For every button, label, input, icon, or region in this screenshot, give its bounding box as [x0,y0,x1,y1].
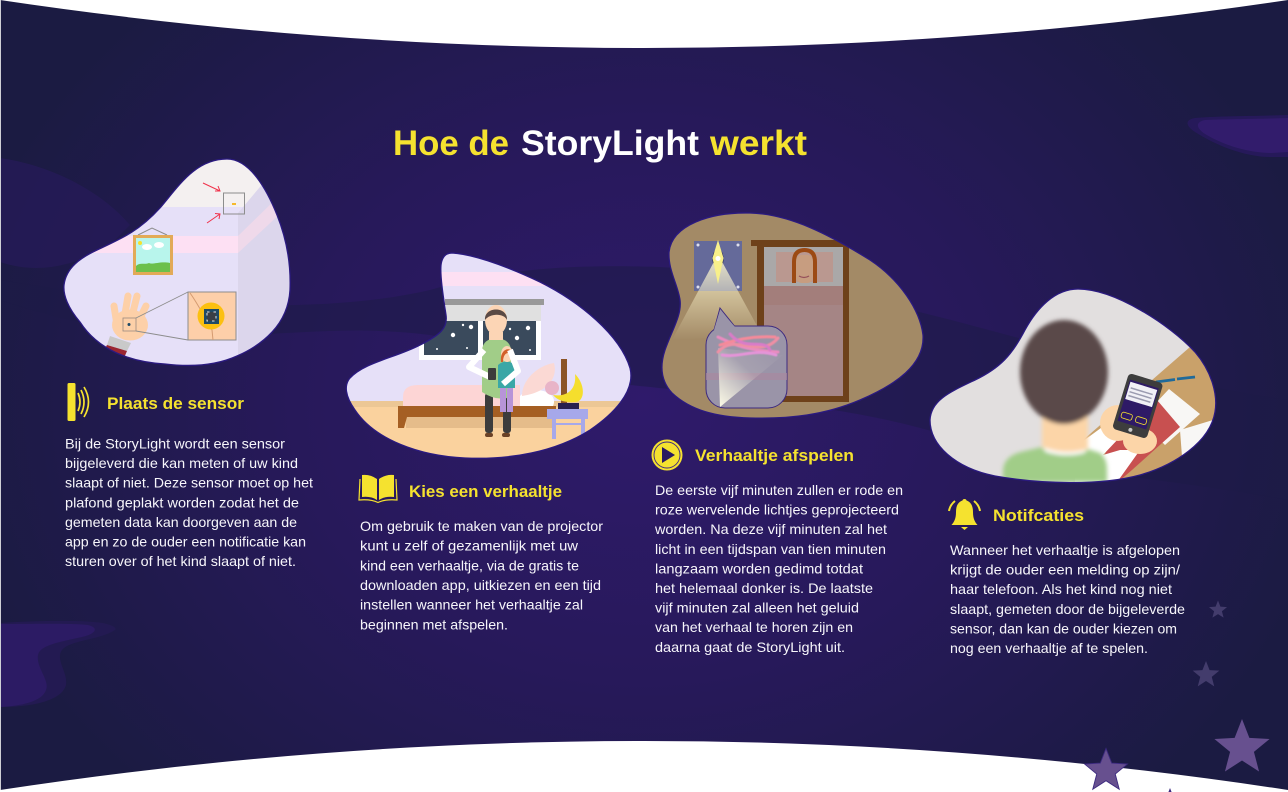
text block: kunt u zelf of gezamenlijk met uw [360,538,579,554]
illustration: parent viewing phone notification [929,288,1216,484]
title [393,124,807,163]
icon: play button [652,440,682,470]
text block [950,542,1185,656]
decorative stars [1085,600,1270,792]
panel: verhaaltje afspelen [652,208,930,655]
heading: Notifcaties [993,506,1084,525]
text block: Om gebruik te maken van de projector [360,518,603,534]
title: Hoe de [393,124,509,163]
text block: Bij de StoryLight wordt een sensor [65,436,285,452]
heading: Verhaaltje afspelen [695,446,854,465]
text block: bijgeleverd die kan meten of uw kind [65,455,298,471]
text block: vijf minuten zal alleen het geluid [655,600,859,616]
text block: Wanneer het verhaaltje is afgelopen [950,542,1180,558]
text block: daarna gaat de StoryLight uit. [655,639,845,655]
text block: De eerste vijf minuten zullen er rode en [655,482,903,498]
text block [65,436,313,569]
text block: worden. Na deze vijf minuten zal het [654,521,887,537]
text block: instellen wanneer het verhaaltje zal [360,597,583,613]
text block: plafond geplakt worden zodat het de [65,494,299,510]
heading: Plaats de sensor [107,394,244,413]
panel: notificaties [925,285,1230,656]
text block: app en zo de ouder een notificatie kan [65,534,306,550]
text block: downloaden app, uitkiezen en een tijd [360,577,601,593]
text block: krijgt de ouder een melding op zijn/ [950,562,1180,578]
text block: sturen over of het kind slaapt of niet. [65,553,296,569]
text block: sensor, dan kan de ouder kiezen om [950,621,1177,637]
title: StoryLight [521,124,699,163]
text block: beginnen met afspelen. [360,616,508,632]
icon: bell [949,499,980,530]
text block: langzaam worden gedimd totdat [655,560,863,576]
text block [654,482,903,655]
illustration: projector lights over sleeping child [655,208,930,423]
text block: roze wervelende lichtjes geprojecteerd [655,502,899,518]
top white curve [0,0,1288,48]
bottom white curve [0,741,1288,792]
text block: het helemaal donker is. De laatste [655,580,873,596]
illustration: parent and child in bedroom [340,250,640,465]
title: werkt [709,124,807,163]
illustration: room with sensor and hand [60,155,300,370]
text block: licht in een tijdspan van tien minuten [655,541,886,557]
text block: van het verhaal te horen zijn en [655,619,853,635]
heading: Kies een verhaaltje [409,482,562,501]
text block: slaapt of niet. Deze sensor moet op het [65,475,313,491]
icon: sensor waves [68,383,88,421]
text block: slaapt, gemeten door de bijgeleverde [950,601,1185,617]
text block [360,518,603,632]
icon: open book [359,475,397,502]
text block: nog een verhaaltje af te spelen. [950,640,1148,656]
text block: kind een verhaaltje, via de gratis te [360,557,579,573]
text block: gemeten data kan doorgeven aan de [65,514,297,530]
panel: plaats de sensor [60,155,313,569]
text block: haar telefoon. Als het kind nog niet [950,581,1172,597]
panel: kies een verhaaltje [340,250,640,632]
